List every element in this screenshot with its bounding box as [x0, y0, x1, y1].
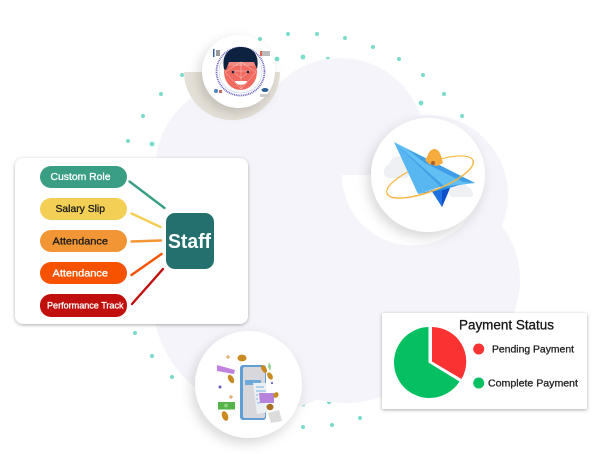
- ticket: [217, 365, 235, 374]
- clouds: [384, 156, 473, 197]
- receipt: [253, 383, 268, 414]
- background cloud: [153, 58, 520, 412]
- panel: payment status: [382, 313, 587, 409]
- legend: complete: Complete Payment: [488, 378, 578, 390]
- ring back half: [387, 156, 473, 194]
- paper: [268, 410, 282, 423]
- pill: custom role: Custom Role: [50, 171, 111, 183]
- pill: attendance orange: Attendance: [52, 236, 108, 248]
- legend: pending: Pending Payment: [492, 344, 574, 356]
- teal dotted ring: [126, 32, 464, 429]
- panel: staff: [15, 158, 248, 324]
- sparkles: [218, 386, 222, 388]
- bell: [425, 149, 443, 166]
- pill: salary slip: Salary Slip: [56, 203, 105, 215]
- card: [259, 393, 274, 403]
- pie chart: [394, 327, 466, 398]
- icon: paper plane badge: [371, 118, 485, 232]
- phone: [240, 365, 266, 420]
- pill: attendance red-orange: Attendance: [52, 268, 108, 280]
- icon: mobile payment badge: [195, 331, 302, 438]
- ring front half: [387, 160, 473, 198]
- title: Payment Status: [459, 318, 554, 332]
- pill: salary slip: [40, 198, 127, 220]
- staff box: [166, 213, 214, 269]
- plane wings: [394, 142, 443, 194]
- plane fin: [431, 188, 450, 207]
- pill: performance track: Performance Track: [47, 300, 124, 310]
- icon: face recognition badge: [202, 35, 275, 108]
- pill: performance track: [40, 294, 127, 317]
- staff box: Staff: [168, 231, 211, 253]
- white wedge behind plane: [342, 175, 483, 246]
- connector lines: [130, 182, 164, 304]
- bank note: [218, 402, 235, 410]
- tan wedge behind face: [184, 72, 280, 120]
- coins: [220, 355, 280, 422]
- pill: attendance orange: [40, 230, 127, 252]
- pill: custom role: [40, 166, 127, 188]
- pill: attendance red-orange: [40, 262, 127, 284]
